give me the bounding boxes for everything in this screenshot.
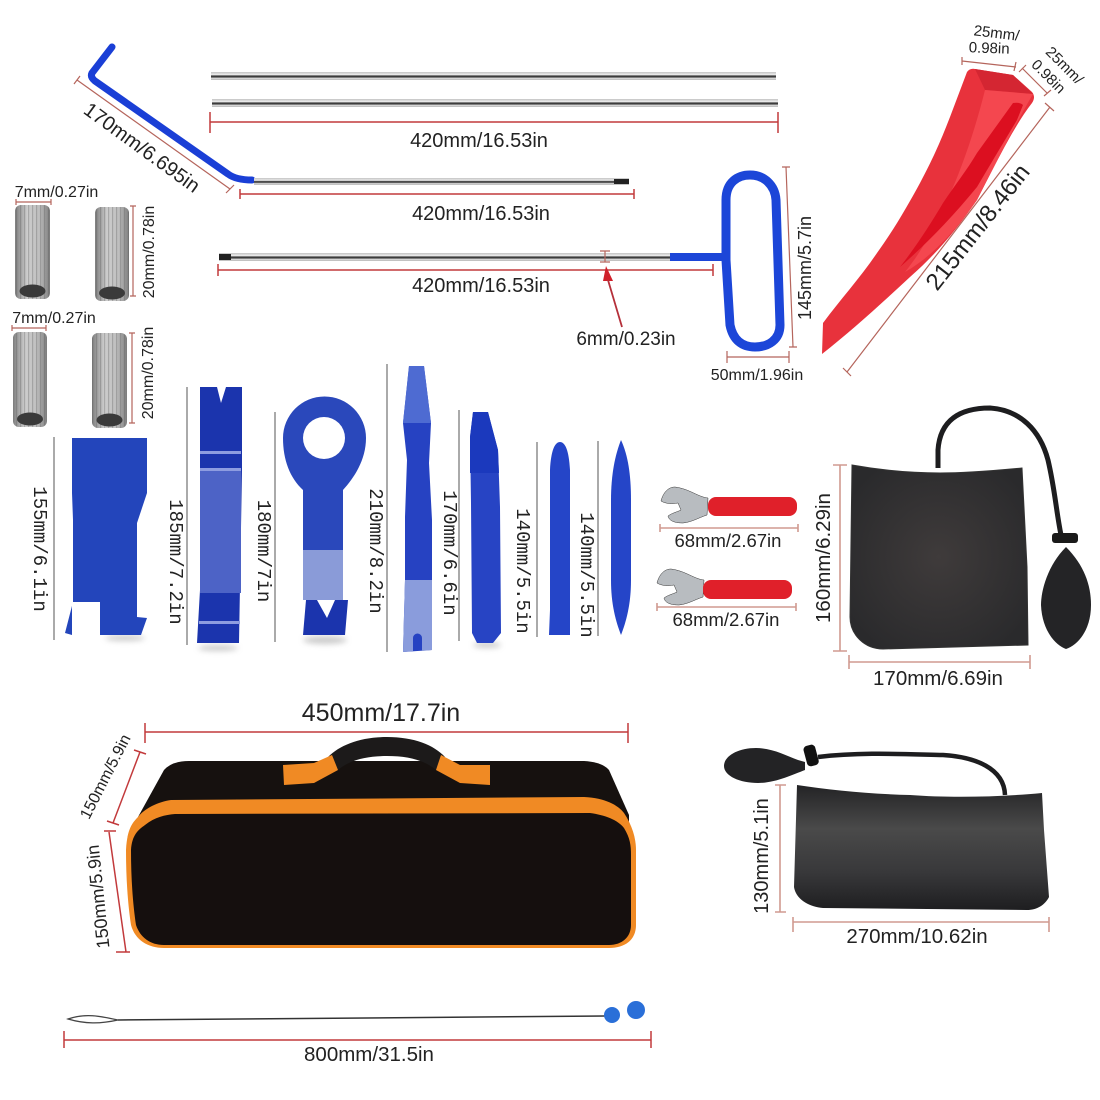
long rods: 420mm/16.53in — [410, 130, 548, 152]
pry tools: 170mm/6.6in — [438, 490, 460, 616]
pry tools: 140mm/5.5in — [575, 512, 597, 638]
T-handle rod: 6mm/0.23in — [576, 329, 676, 350]
sleeves: 20mm/0.78in — [140, 327, 157, 419]
long rods — [210, 72, 778, 152]
sleeves: 20mm/0.78in — [141, 206, 158, 298]
lower air wedge with pump: 130mm/5.1in — [751, 798, 773, 914]
tool bag — [77, 699, 636, 952]
T-handle rod: 50mm/1.96in — [711, 367, 803, 384]
tool: forked bar — [403, 366, 432, 652]
red wedge: 0.98in — [1028, 56, 1069, 97]
pry tools — [28, 364, 631, 652]
tool bag: 450mm/17.7in — [302, 699, 460, 727]
tool: ring remover — [283, 396, 366, 635]
tool bag: 150mm/5.9in — [77, 732, 135, 822]
tool: wide scraper — [65, 438, 147, 647]
upper air wedge with pump: 170mm/6.69in — [873, 667, 1003, 690]
tool: notched bar — [197, 387, 242, 643]
red wedge: 0.98in — [968, 39, 1010, 58]
T-handle rod — [218, 167, 815, 384]
tool shadows — [105, 635, 501, 651]
lower air wedge with pump: 270mm/10.62in — [846, 925, 988, 948]
tool: round flat bar — [549, 442, 570, 635]
pry tools: 155mm/6.1in — [28, 486, 50, 612]
L-hook rod — [74, 47, 634, 225]
tool: double-pointed bar — [611, 440, 631, 635]
sleeves — [12, 184, 158, 428]
pry tools: 180mm/7in — [252, 500, 274, 602]
lower air wedge with pump — [724, 744, 1049, 948]
tool: angled bar — [470, 412, 501, 643]
red wedge — [822, 22, 1087, 376]
upper air wedge with pump — [812, 408, 1091, 690]
pry tools: 185mm/7.2in — [164, 499, 186, 625]
wrenches: 68mm/2.67in — [675, 530, 781, 551]
red wedge: 215mm/8.46in — [921, 159, 1036, 296]
long wire threader — [64, 1001, 651, 1066]
red wedge: 25mm/ — [973, 22, 1021, 45]
L-hook rod: 420mm/16.53in — [412, 203, 550, 225]
L-hook rod: 170mm/6.695in — [79, 99, 204, 198]
pry tools: 210mm/8.2in — [364, 488, 386, 614]
T-handle rod: 420mm/16.53in — [412, 275, 550, 297]
long wire threader: 800mm/31.5in — [304, 1043, 434, 1066]
upper air wedge with pump: 160mm/6.29in — [812, 493, 835, 623]
wrenches: 68mm/2.67in — [673, 609, 779, 630]
tool bag: 150mm/5.9in — [83, 844, 113, 949]
pry tools: 140mm/5.5in — [511, 508, 533, 634]
T-handle rod: 145mm/5.7in — [795, 216, 815, 320]
sleeves: 7mm/0.27in — [15, 184, 98, 201]
wrenches — [657, 487, 798, 630]
sleeves: 7mm/0.27in — [12, 310, 96, 327]
red wedge: 25mm/ — [1042, 44, 1087, 89]
